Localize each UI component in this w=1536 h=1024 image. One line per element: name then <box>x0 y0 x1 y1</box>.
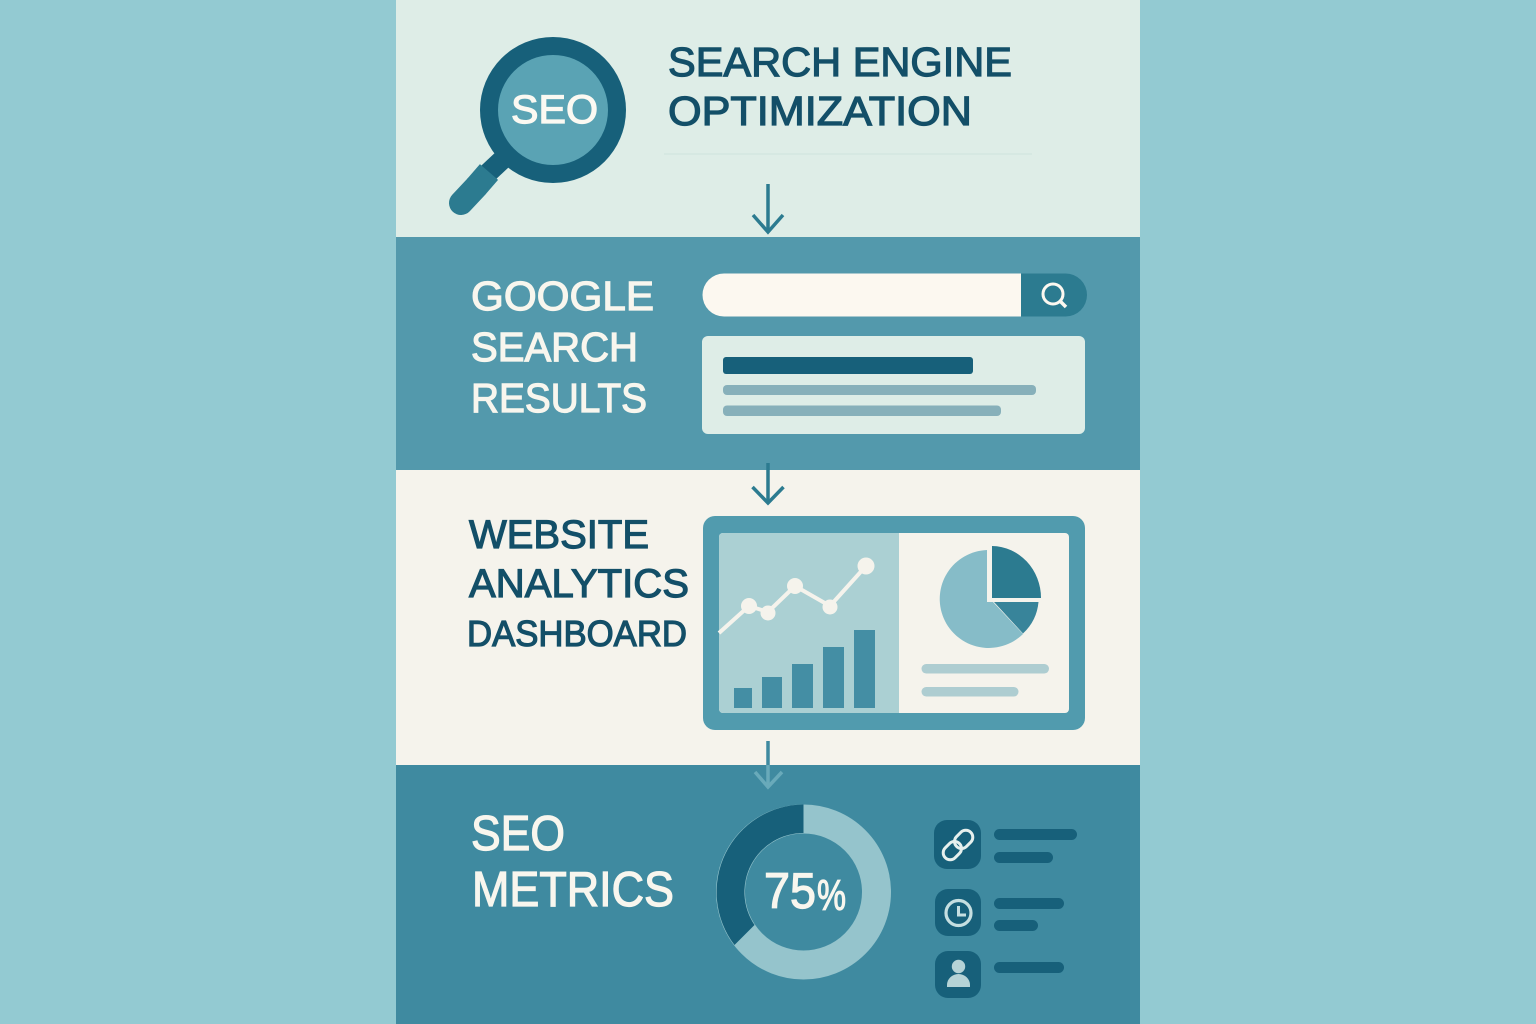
icon: search <box>1043 284 1066 307</box>
panel: google search results <box>396 237 1140 470</box>
icon: person <box>947 960 970 987</box>
line chart <box>719 558 874 633</box>
metric row: users <box>935 951 1064 998</box>
bar chart <box>734 630 875 708</box>
panel: seo metrics <box>396 741 1140 1024</box>
legend lines <box>922 664 1049 696</box>
heading: search engine optimization: OPTIMIZATION <box>668 88 972 134</box>
heading: seo metrics: METRICS <box>472 863 674 917</box>
panel: website analytics dashboard <box>396 463 1140 765</box>
heading: seo metrics <box>471 807 674 917</box>
metric row: links <box>934 820 1077 869</box>
metric row: time <box>935 889 1064 936</box>
icon: SEO magnifying glass: SEO <box>511 88 598 132</box>
heading: search engine optimization <box>668 39 1012 134</box>
search result card <box>702 336 1085 434</box>
heading: website analytics dashboard: WEBSITE <box>469 513 649 557</box>
heading: website analytics dashboard <box>467 513 689 654</box>
panel: search engine optimization <box>396 0 1140 237</box>
donut chart: 75% <box>717 804 876 965</box>
icon: SEO magnifying glass <box>461 37 626 203</box>
search bar <box>702 274 1087 316</box>
icon: clock <box>946 900 971 926</box>
heading: website analytics dashboard: DASHBOARD <box>467 613 687 654</box>
dashboard frame <box>703 516 1085 730</box>
heading: google search results: GOOGLE <box>471 273 654 319</box>
icon: chain link <box>940 827 976 863</box>
arrow: to website analytics dashboard <box>752 463 784 503</box>
pie chart <box>940 546 1041 648</box>
heading: google search results: RESULTS <box>471 375 647 421</box>
donut chart: 75%: % <box>817 872 846 920</box>
heading: seo metrics: SEO <box>471 807 565 861</box>
arrow: to google search results <box>753 184 783 232</box>
heading: website analytics dashboard: ANALYTICS <box>469 562 689 606</box>
heading: google search results <box>471 273 654 421</box>
heading: google search results: SEARCH <box>471 324 638 370</box>
donut chart: 75%: 75 <box>764 863 816 919</box>
arrow: to seo metrics <box>755 741 782 787</box>
heading: search engine optimization: SEARCH ENGINE <box>668 39 1012 85</box>
